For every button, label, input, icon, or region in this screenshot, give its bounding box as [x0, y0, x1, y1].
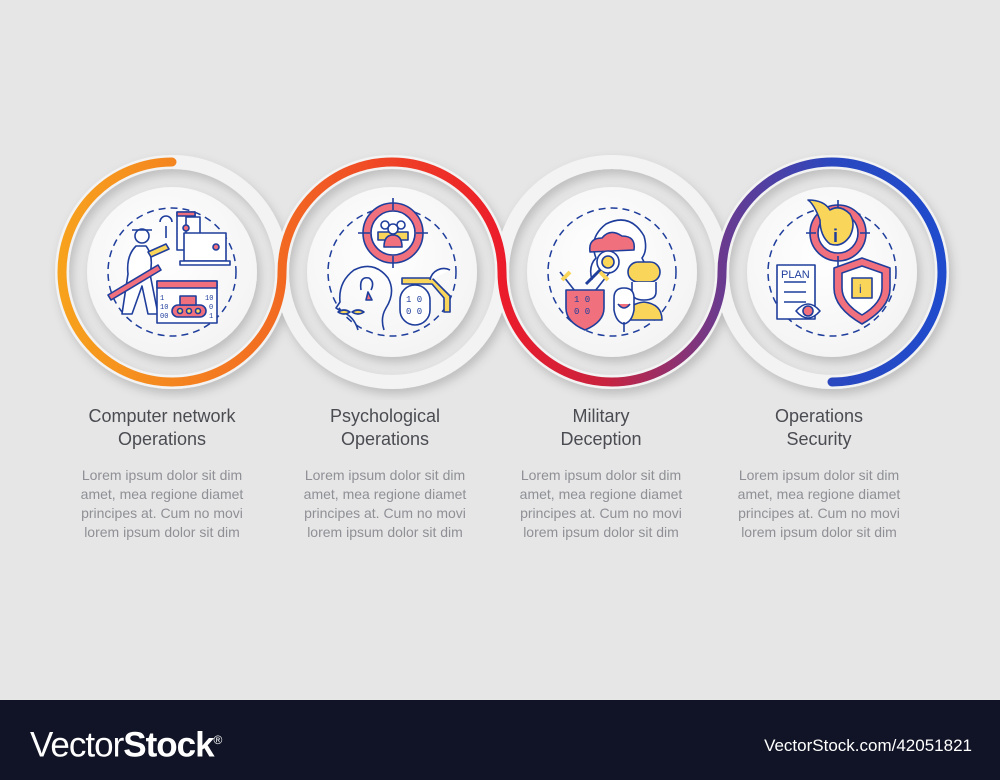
icon: operations security: [777, 200, 890, 324]
column 1 text: Lorem ipsum dolor sit dim: [82, 467, 242, 483]
column 2 text: principes at. Cum no movi: [304, 505, 466, 521]
column 2 text: lorem ipsum dolor sit dim: [307, 524, 463, 540]
icon: psychological ops: [336, 198, 450, 330]
diagram: 1: [160, 295, 164, 303]
column 4 text: amet, mea regione diamet: [738, 486, 900, 502]
column 3 text: principes at. Cum no movi: [520, 505, 682, 521]
diagram: 1 0: [574, 295, 590, 305]
column 3 text: Lorem ipsum dolor sit dim: [521, 467, 681, 483]
column 4 text: Operations: [775, 406, 863, 426]
logo: VectorStock®: [30, 726, 221, 765]
column 1 text: principes at. Cum no movi: [81, 505, 243, 521]
diagram: 00: [160, 313, 168, 321]
footer bar: [0, 700, 1000, 780]
dashed circles: [108, 208, 896, 336]
column 3 text: Deception: [560, 429, 642, 449]
column 2 text: Operations: [341, 429, 429, 449]
icon: operations security: i: [833, 226, 838, 246]
column 4 text: lorem ipsum dolor sit dim: [741, 524, 897, 540]
column 4 text: [738, 406, 900, 540]
column 1 text: Operations: [118, 429, 206, 449]
diagram: 10: [160, 304, 168, 312]
column 1 text: [81, 406, 244, 540]
icon: computer network ops: [108, 212, 230, 323]
column 1 text: lorem ipsum dolor sit dim: [84, 524, 240, 540]
column 3 text: [520, 406, 682, 540]
url: VectorStock.com/42051821: [764, 736, 972, 755]
diagram: PLAN: [781, 269, 810, 281]
column 4 text: Security: [786, 429, 852, 449]
diagram: [54, 155, 956, 398]
diagram: 1: [209, 313, 213, 321]
column 2 text: amet, mea regione diamet: [304, 486, 466, 502]
column 3 text: amet, mea regione diamet: [520, 486, 682, 502]
column 2 text: Psychological: [330, 406, 440, 426]
diagram: 0: [209, 304, 213, 312]
icon: operations security: i: [859, 282, 862, 296]
grey rings: [62, 162, 942, 382]
column 3 text: Military: [572, 406, 630, 426]
diagram: 1 0: [406, 295, 422, 305]
white inner circles: [87, 187, 917, 357]
column 2 text: [304, 406, 466, 540]
diagram: 0 0: [406, 307, 422, 317]
gradient path: [62, 162, 942, 382]
column 4 text: principes at. Cum no movi: [738, 505, 900, 521]
column 2 text: Lorem ipsum dolor sit dim: [305, 467, 465, 483]
column 1 text: amet, mea regione diamet: [81, 486, 243, 502]
column 4 text: Lorem ipsum dolor sit dim: [739, 467, 899, 483]
column 1 text: Computer network: [88, 406, 236, 426]
icon: military deception: [560, 220, 662, 332]
column 3 text: lorem ipsum dolor sit dim: [523, 524, 679, 540]
diagram: 0 0: [574, 307, 590, 317]
diagram: 10: [205, 295, 213, 303]
